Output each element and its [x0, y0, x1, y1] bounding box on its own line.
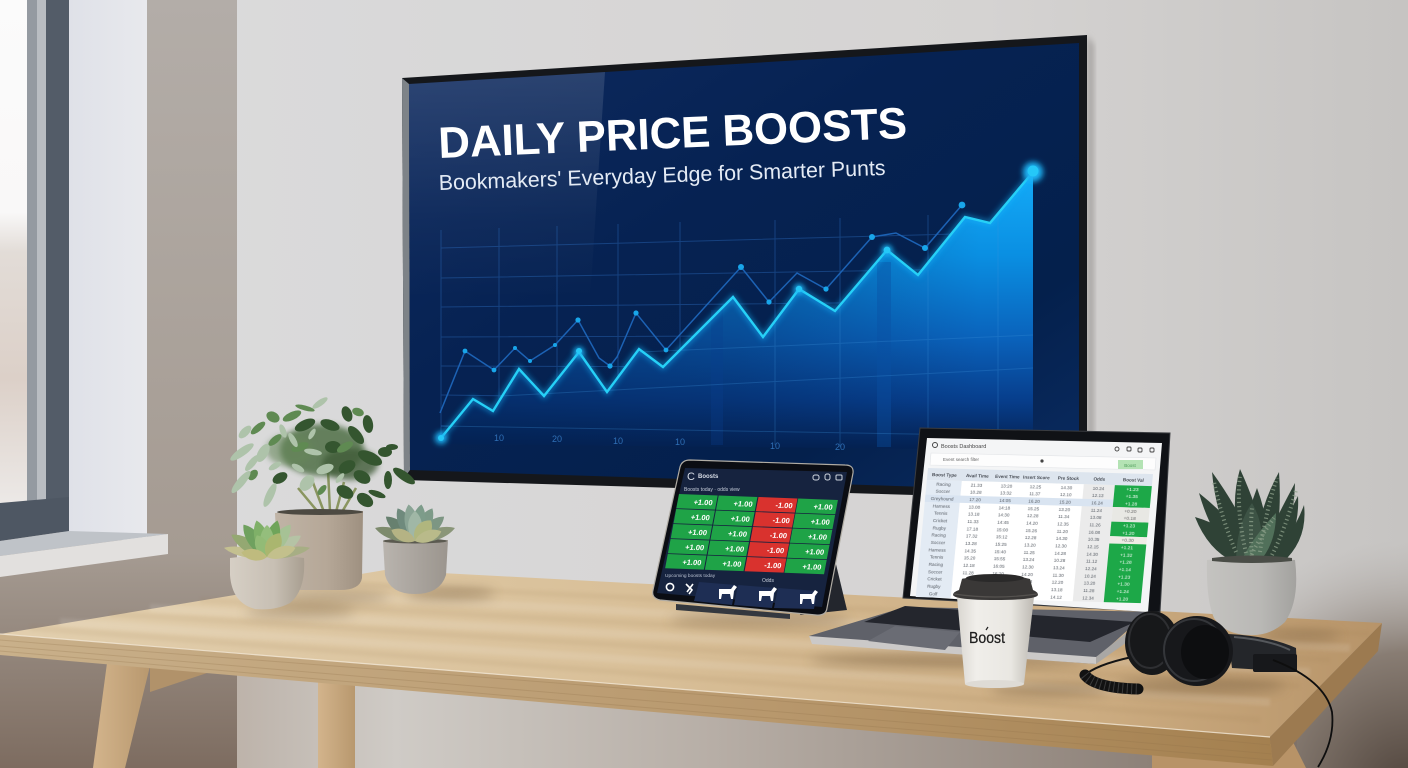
laptop keyboard	[864, 606, 1135, 642]
laptop boost table: +1.21	[1121, 545, 1134, 551]
window	[0, 0, 168, 577]
laptop boost table: Racing	[936, 482, 951, 487]
headphones	[1084, 611, 1332, 767]
laptop boost table: 13.20	[1058, 507, 1071, 512]
laptop boost table: 16.24	[1091, 500, 1104, 506]
aloe plant in pot	[1195, 469, 1305, 635]
laptop boost table: 11.12	[1086, 559, 1098, 564]
laptop boost table: Racing	[931, 533, 946, 538]
tablet odds grid: -1.00	[766, 546, 785, 555]
chart: axis labels: 10	[494, 433, 504, 443]
pot	[275, 510, 363, 590]
laptop boost table: +0.20	[1124, 509, 1137, 515]
laptop boost table: 11.25	[1023, 550, 1036, 555]
laptop boost table: 11.28	[962, 570, 974, 575]
coiled cable	[1084, 657, 1138, 689]
laptop title bar: Boosts Dashboard	[941, 444, 986, 450]
leaves	[228, 395, 417, 510]
tablet odds grid: +1.00	[807, 532, 828, 542]
laptop boost table: 16:20	[992, 571, 1005, 576]
laptop boost table: 14.12	[1050, 594, 1063, 600]
tablet header: C	[687, 471, 695, 483]
laptop boost table: 13.28	[965, 541, 977, 546]
laptop lid	[903, 428, 1170, 612]
desk top	[0, 570, 1382, 737]
desk front face	[0, 634, 1273, 766]
laptop boost table: 15.25	[1027, 506, 1040, 511]
chart: filled area	[441, 172, 1033, 450]
tablet odds grid: +1.00	[724, 544, 745, 554]
laptop boost table: +1.20	[1116, 596, 1129, 603]
plant: succulent right	[373, 503, 457, 594]
laptop boost table: Golf	[929, 591, 938, 596]
tablet footer navigation	[665, 573, 818, 609]
laptop boost table: +1.23	[1123, 523, 1136, 530]
laptop boost table: 14.28	[1054, 551, 1067, 556]
laptop boost table: 16:50	[991, 586, 1003, 591]
laptop boost table: 12.30	[961, 585, 973, 590]
subtitle: Bookmakers' Everyday Edge for Smarter Punts	[438, 156, 886, 195]
laptop boost table: 15.20	[964, 556, 976, 561]
laptop base	[809, 607, 1160, 664]
tablet odds grid: +1.00	[810, 517, 831, 527]
laptop boost table: 12.20	[1051, 580, 1064, 585]
laptop boost table: 11.30	[1052, 573, 1064, 578]
laptop boost table: 14:30	[998, 513, 1010, 518]
laptop boost table: Cricket	[933, 518, 948, 523]
tablet odds grid: +1.00	[733, 499, 753, 509]
front ear cup	[1161, 616, 1233, 686]
laptop boost table: 21.33	[971, 483, 983, 488]
laptop	[809, 428, 1170, 664]
laptop boost table: Soccer	[928, 569, 943, 575]
laptop boost table: +1.24	[1116, 589, 1129, 595]
laptop address bar: Boost	[1124, 463, 1136, 468]
tablet odds grid	[665, 494, 838, 574]
laptop boost table: 13.20	[1024, 542, 1036, 548]
laptop boost table: Rugby	[927, 584, 941, 589]
laptop boost table: 15.20	[1059, 500, 1072, 505]
laptop boost table: Soccer	[935, 489, 951, 494]
laptop boost table: 14.35	[964, 548, 977, 554]
laptop boost table: 14.30	[1086, 551, 1099, 557]
foliage mass	[266, 424, 378, 480]
chart: secondary line	[440, 202, 965, 413]
laptop boost table: 15:25	[995, 542, 1007, 547]
laptop boost table: 12.14	[1019, 594, 1032, 599]
tablet odds grid: -1.00	[769, 531, 788, 540]
laptop boost table: 10.24	[1093, 486, 1105, 491]
laptop boost table: 15:00	[996, 527, 1009, 532]
laptop boost table: 15:40	[994, 549, 1007, 554]
laptop boost table: 15:12	[996, 534, 1008, 540]
plant: leafy plant in pot	[228, 395, 417, 590]
laptop boost table: 13.18	[968, 512, 980, 517]
laptop boost table: Soccer	[931, 540, 946, 545]
laptop boost table: 13.18	[1051, 587, 1063, 592]
laptop boost table: +1.32	[1120, 552, 1133, 559]
laptop boost table: 15:55	[994, 556, 1006, 562]
laptop boost table: 11.33	[967, 519, 979, 524]
laptop boost table: 12.34	[1082, 595, 1095, 601]
laptop boost table: 12.30	[1055, 543, 1067, 549]
tablet odds grid: +1.00	[727, 529, 748, 539]
laptop boost table: 11.22	[1020, 586, 1032, 592]
headband	[1228, 634, 1297, 672]
stems	[298, 470, 356, 512]
plant: succulent left	[223, 519, 311, 609]
tablet footer navigation: Upcoming boosts today	[665, 573, 716, 579]
laptop boost table: 13.00	[968, 504, 981, 510]
chart: grid and lines	[435, 162, 1043, 452]
laptop boost table: Odds	[1093, 476, 1106, 482]
laptop boost table: Boost Type	[932, 472, 957, 478]
laptop boost table: Tennis	[930, 555, 944, 560]
tablet odds grid: -1.00	[772, 516, 791, 525]
chart: axis labels: 10	[770, 441, 780, 451]
laptop address bar	[930, 453, 1156, 470]
tablet header: Boosts	[698, 474, 719, 480]
tablet odds grid: -1.00	[763, 561, 782, 570]
laptop title bar	[932, 442, 1154, 452]
laptop boost table: 14.22	[961, 577, 974, 583]
desk right side	[1270, 623, 1382, 766]
laptop boost table: Tennis	[934, 511, 948, 516]
laptop boost table: 14.30	[1061, 485, 1073, 490]
laptop boost table: +1.23	[1126, 487, 1139, 493]
coffee cup	[953, 574, 1038, 688]
laptop boost table: 13:32	[1000, 491, 1012, 496]
cup logo: Boost	[969, 630, 1006, 647]
laptop boost table: Insert Score	[1023, 475, 1050, 480]
laptop boost table: Harness	[933, 503, 951, 509]
laptop boost table: 14:18	[998, 505, 1011, 511]
tablet odds grid: +1.00	[693, 498, 713, 507]
tablet body	[653, 460, 853, 615]
title: DAILY PRICE BOOSTS	[437, 99, 908, 168]
laptop boost table: 14:45	[997, 520, 1009, 525]
laptop boost table: 12.30	[1022, 564, 1034, 570]
laptop boost table: Avail Time	[966, 473, 989, 479]
laptop boost table: 16.08	[1088, 530, 1101, 535]
chart: axis labels	[494, 433, 845, 452]
laptop boost table: +1.35	[1125, 494, 1138, 500]
laptop boost table: 12.24	[1085, 566, 1097, 571]
laptop boost table: 16.20	[1028, 499, 1041, 504]
laptop boost table: Harness	[928, 547, 947, 553]
tablet odds grid: +1.00	[813, 502, 833, 512]
tablet stand	[800, 560, 847, 615]
laptop boost table: 10.28	[970, 490, 982, 495]
laptop boost table: Event Time	[995, 474, 1020, 479]
back ear cup	[1125, 611, 1179, 675]
tablet odds grid: +1.00	[722, 559, 742, 569]
desk shadows	[245, 588, 1340, 696]
laptop boost table: +0.18	[1123, 516, 1136, 522]
laptop boost table: 12.13	[1092, 493, 1104, 498]
laptop boost table: 11.37	[1029, 491, 1041, 497]
aloe leaves	[1195, 469, 1305, 563]
laptop boost table: 12.28	[1025, 535, 1037, 541]
tablet header	[684, 471, 842, 493]
tablet footer navigation: Odds	[762, 578, 774, 584]
desk legs	[90, 662, 1306, 768]
laptop boost table: Cricket	[927, 576, 943, 582]
laptop boost table: 12.28	[1027, 513, 1039, 519]
chart: axis labels: 10	[613, 436, 623, 446]
laptop boost table: Pre Stock	[1058, 476, 1080, 481]
chart: axis labels: 10	[675, 437, 685, 447]
chart: axis labels: 20	[835, 442, 845, 452]
cup lid	[953, 574, 1038, 600]
long cable	[1273, 660, 1332, 767]
tablet odds grid: +1.00	[804, 547, 825, 557]
laptop boost table: 17.20	[969, 497, 982, 502]
laptop boost table: Boost Val	[1123, 477, 1144, 483]
aloe pot	[1207, 558, 1296, 635]
laptop boost table: +1.28	[1119, 560, 1132, 566]
laptop boost table: 13.12	[960, 592, 973, 597]
laptop boost table: 11.26	[1089, 522, 1101, 528]
chart: axis labels: 20	[552, 434, 562, 444]
laptop boost table: 11.34	[1058, 514, 1070, 519]
laptop boost table: 12.25	[1030, 484, 1042, 489]
laptop boost table: 12.18	[963, 563, 975, 568]
tablet odds grid: +1.00	[682, 558, 702, 567]
laptop boost table: 11.24	[1091, 508, 1103, 513]
tablet odds grid: +1.00	[802, 562, 822, 572]
laptop boost table: 17.32	[966, 534, 978, 539]
laptop boost table: 13.20	[1083, 581, 1096, 586]
tablet odds grid: -1.00	[775, 501, 793, 510]
tablet header: Boosts today · odds view	[684, 487, 740, 493]
wall-mounted TV	[402, 35, 1094, 505]
laptop boost table: 10.28	[1054, 558, 1066, 563]
laptop boost table: 15.26	[1025, 528, 1038, 533]
desk	[0, 570, 1382, 768]
tablet on stand	[653, 460, 853, 619]
laptop boost table: 11.28	[1083, 588, 1095, 593]
laptop boost table: Greyhound	[930, 496, 954, 502]
laptop boost table: +1.14	[1118, 567, 1131, 573]
tablet odds grid: +1.00	[690, 513, 711, 522]
laptop boost table	[916, 468, 1153, 603]
tablet odds grid: +1.00	[730, 514, 751, 524]
laptop boost table: 13.08	[1090, 515, 1102, 520]
laptop boost table: +1.20	[1122, 531, 1135, 537]
laptop boost table: +0.30	[1121, 538, 1134, 544]
laptop boost table: 12.15	[1087, 544, 1099, 550]
laptop boost table: 17.18	[966, 526, 979, 532]
laptop boost table: 11.20	[1057, 529, 1069, 534]
laptop boost table: 14.20	[1021, 572, 1034, 577]
tablet odds grid: +1.00	[687, 528, 708, 537]
chart: main rising line	[435, 162, 1043, 444]
laptop boost table: 14:05	[999, 498, 1012, 503]
laptop boost table: Rugby	[932, 525, 947, 531]
laptop boost table: +1.28	[1125, 501, 1138, 508]
laptop boost table: 16:05	[993, 564, 1005, 569]
laptop address bar: Event search filter	[943, 457, 980, 462]
laptop boost table: 12.18	[1020, 579, 1033, 584]
laptop boost table: 12.10	[1060, 492, 1072, 498]
laptop boost table: 10.35	[1088, 537, 1100, 542]
laptop boost table: Racing	[928, 562, 944, 567]
laptop boost table: +1.23	[1118, 574, 1131, 581]
laptop boost table: 17:05	[990, 593, 1003, 598]
laptop boost table: 14.20	[1026, 521, 1038, 526]
laptop boost table: 14.30	[1056, 536, 1068, 541]
laptop boost table: 13.24	[1023, 557, 1035, 562]
laptop boost table: 13.24	[1053, 565, 1065, 571]
laptop boost table: +1.30	[1117, 582, 1130, 588]
tablet odds grid: +1.00	[684, 543, 705, 552]
laptop boost table: 13:20	[1001, 483, 1013, 489]
laptop boost table: 12.35	[1057, 521, 1069, 527]
laptop boost table: 16:35	[991, 578, 1004, 584]
laptop boost table: 10.24	[1084, 573, 1097, 579]
